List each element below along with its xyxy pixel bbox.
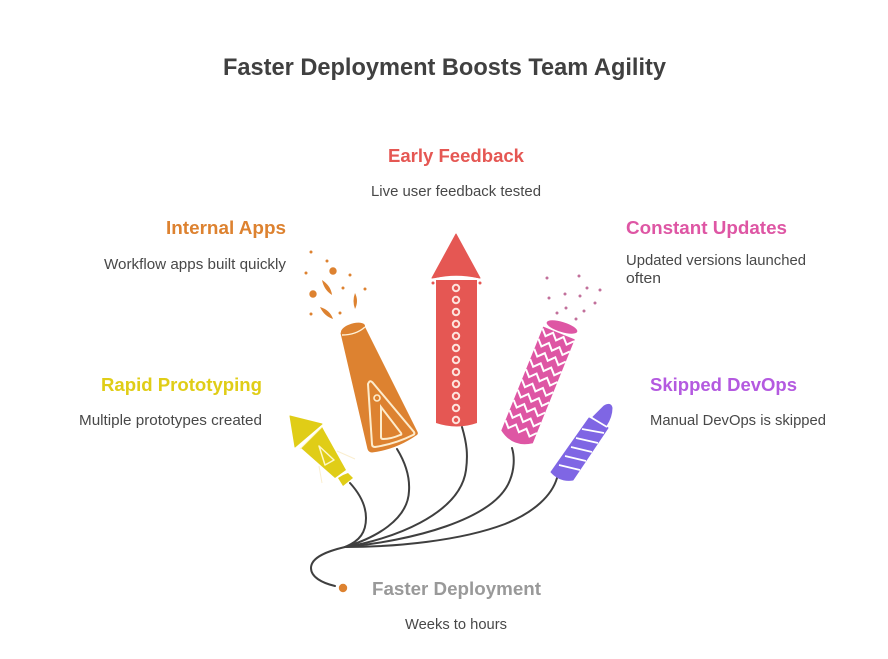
label: faster deployment — [372, 578, 541, 633]
label: early feedback: Live user feedback tested — [371, 184, 541, 200]
label: constant updates: Updated versions launched — [626, 253, 806, 269]
label: constant updates: often — [626, 271, 661, 287]
fuse lines — [311, 427, 557, 586]
label: rapid prototyping — [79, 374, 262, 429]
label: faster deployment: Weeks to hours — [405, 617, 507, 633]
label: internal apps: Internal Apps — [166, 217, 286, 238]
label: skipped devops — [650, 374, 826, 429]
label: rapid prototyping: Rapid Prototyping — [101, 374, 262, 395]
label: early feedback — [371, 145, 541, 200]
label: skipped devops: Skipped DevOps — [650, 374, 797, 395]
label: internal apps: Workflow apps built quickly — [104, 257, 287, 273]
label: internal apps — [104, 217, 287, 273]
label: early feedback: Early Feedback — [388, 145, 525, 166]
firework: skipped devops (purple) — [551, 404, 612, 480]
label: constant updates — [626, 217, 806, 287]
label: skipped devops: Manual DevOps is skipped — [650, 413, 826, 429]
title: Faster Deployment Boosts Team Agility — [223, 54, 666, 81]
firework: early feedback (red) — [432, 234, 482, 426]
firework: constant updates (pink) — [499, 318, 579, 449]
label: constant updates: Constant Updates — [626, 217, 787, 238]
confetti: pink — [546, 274, 602, 320]
start dot — [339, 584, 347, 592]
label: rapid prototyping: Multiple prototypes created — [79, 413, 262, 429]
confetti: orange — [304, 250, 366, 319]
firework: rapid prototyping (yellow) — [290, 416, 355, 486]
label: faster deployment: Faster Deployment — [372, 578, 541, 599]
firework: internal apps (orange) — [339, 320, 417, 452]
